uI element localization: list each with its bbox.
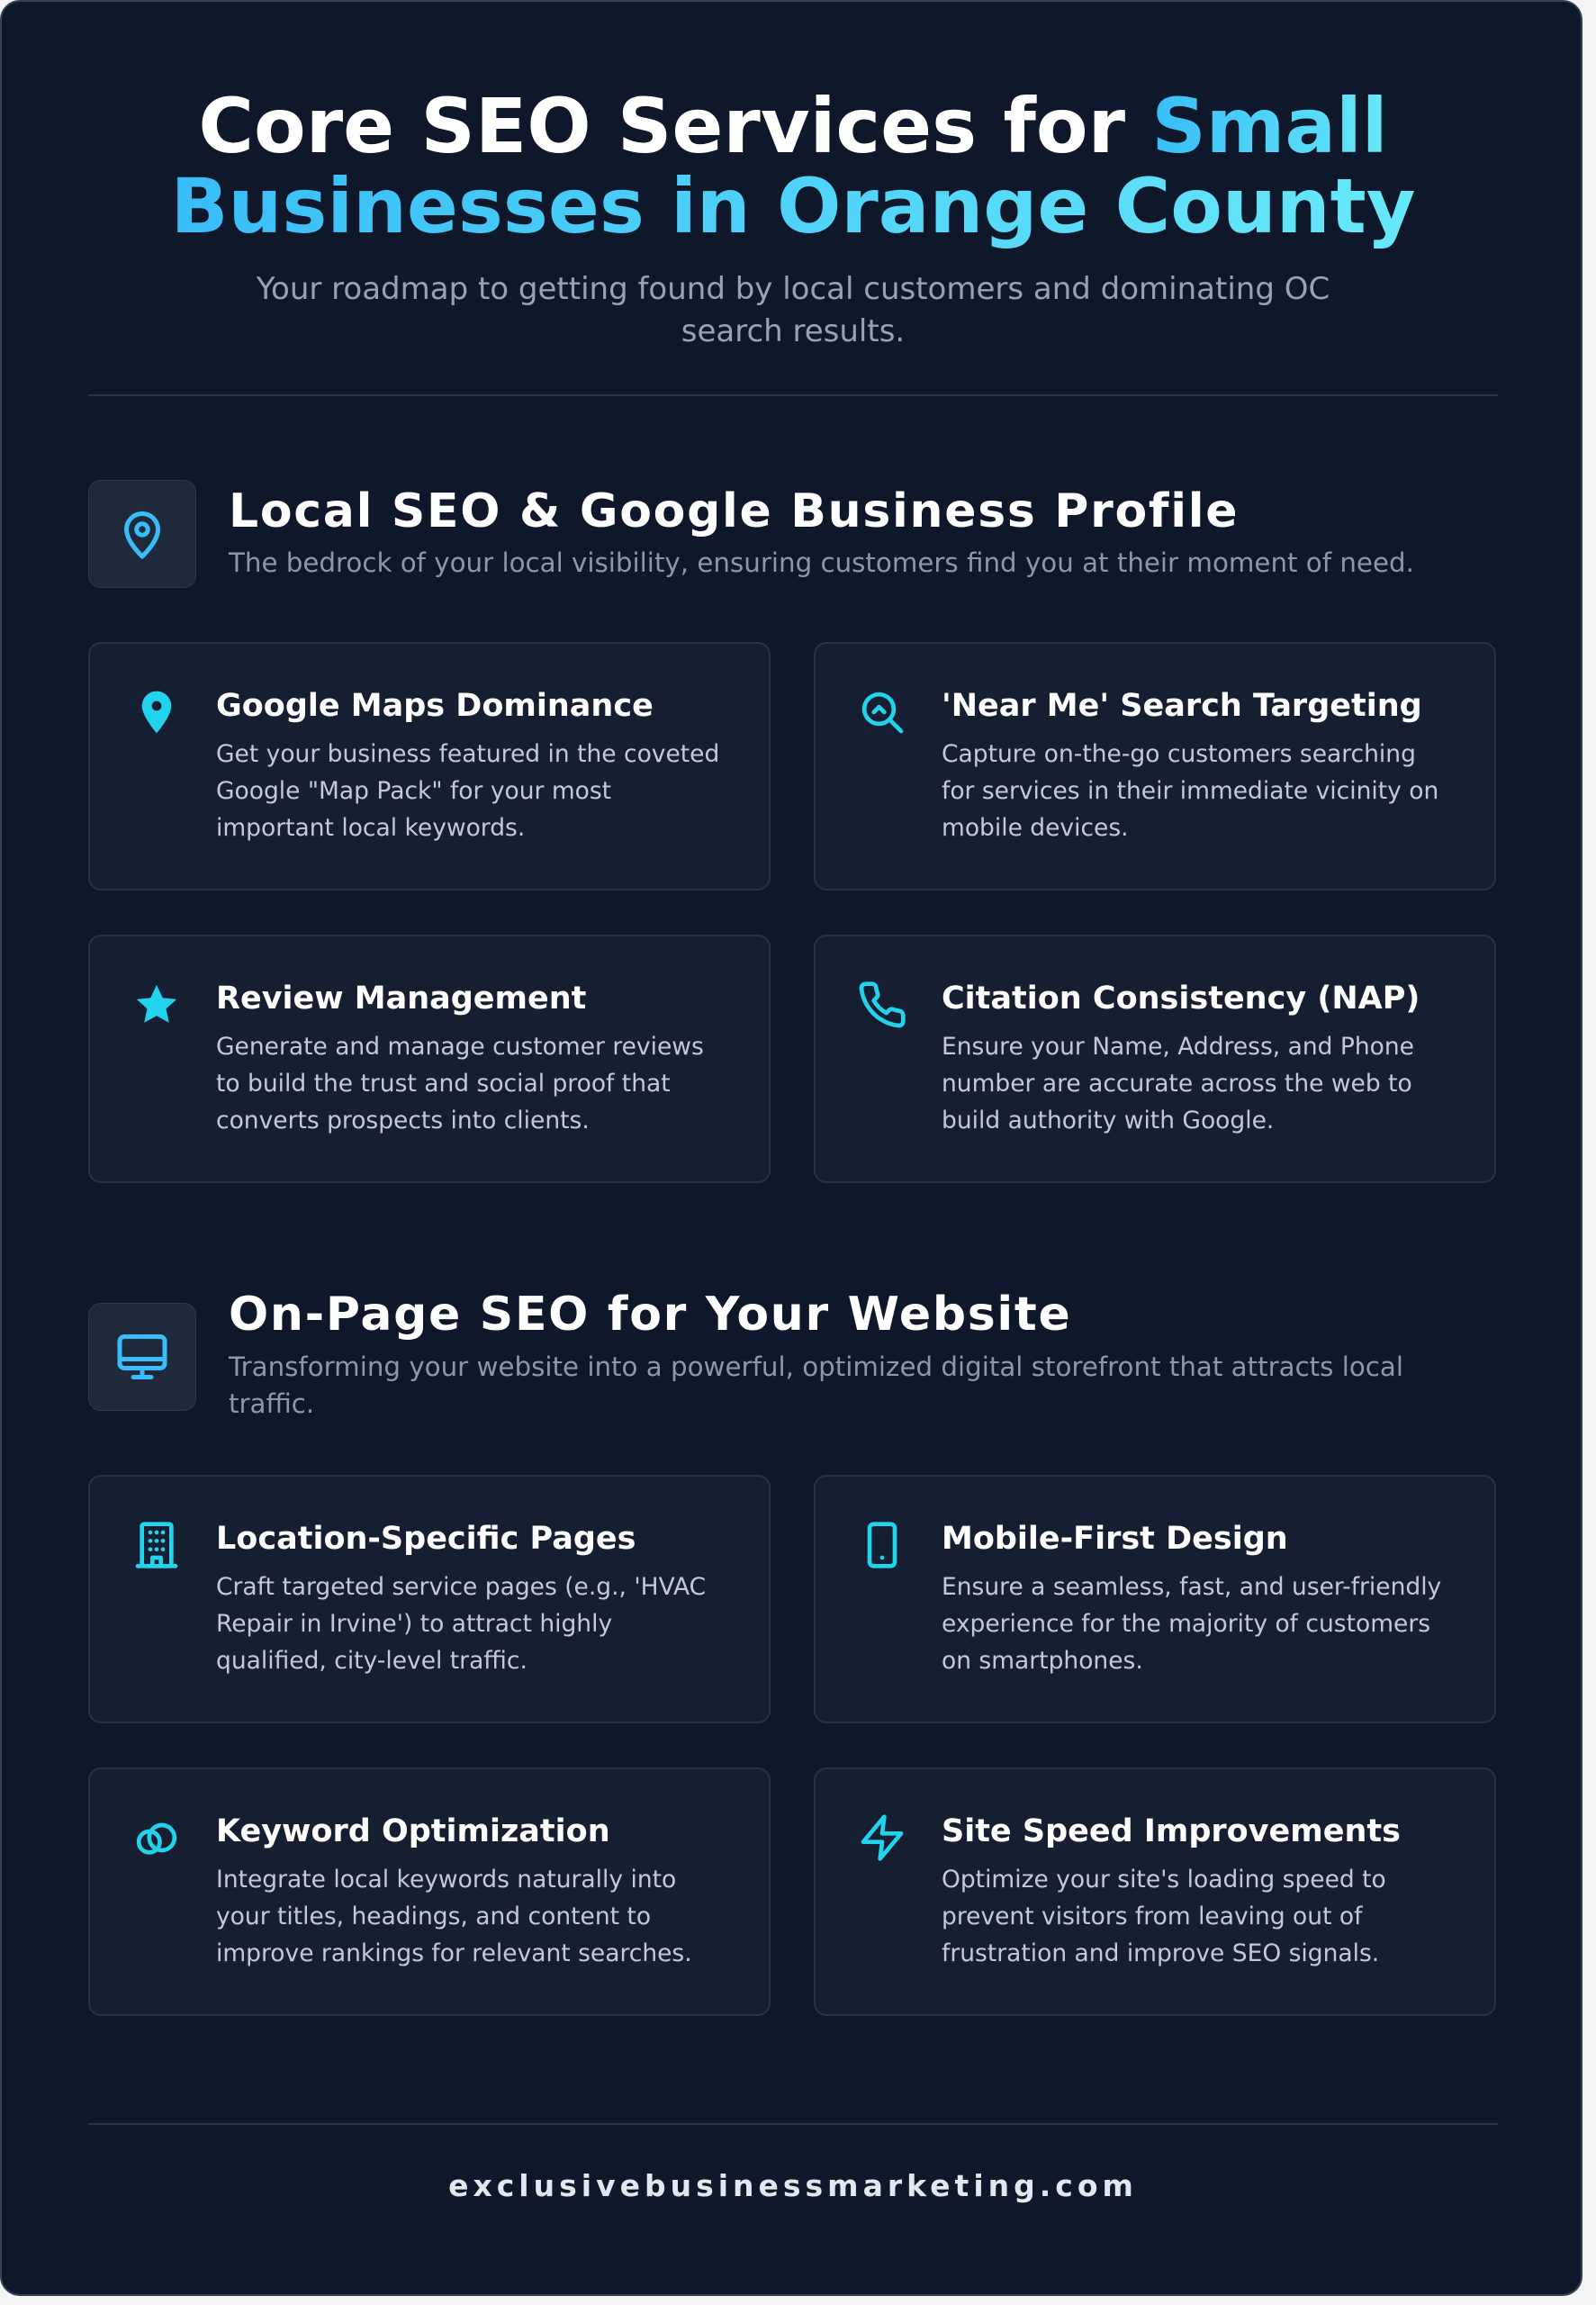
card: Location-Specific Pages [88, 1475, 771, 1723]
card: Mobile-First Design: Mobile-First Design [942, 1521, 1288, 1557]
heading: section 2: On-Page SEO for Your Website [229, 1288, 1071, 1342]
icon: star [137, 985, 176, 1023]
card: Near Me Search Targeting [814, 642, 1496, 890]
card: Site Speed Improvements: Optimize your site's loading speed to prevent visitors from leaving out of frustration and improve SEO signals. [942, 1866, 1386, 1967]
card: Citation Consistency: Citation Consistency (NAP) [942, 981, 1420, 1017]
title [171, 82, 1415, 250]
card: Location-Specific Pages: Location-Specific Pages [216, 1521, 636, 1557]
card: Review Management: Generate and manage customer reviews to build the trust and social proof that converts prospects into clients. [216, 1033, 704, 1134]
card: Keyword Optimization [88, 1767, 771, 2016]
footer: exclusivebusinessmarketing.com [448, 2168, 1138, 2203]
icon: section 2 monitor [88, 1303, 196, 1411]
icon: smartphone [868, 1522, 897, 1568]
icon: map pin [142, 692, 171, 733]
card: Keyword Optimization: Keyword Optimization [216, 1813, 610, 1849]
icon: building [135, 1522, 178, 1568]
icon: search [862, 692, 904, 733]
title: Businesses in Orange County [171, 162, 1415, 250]
icon: lightning [861, 1814, 904, 1861]
heading: section 1: Local SEO & Google Business Profile [229, 484, 1239, 538]
card: Review Management: Review Management [216, 981, 586, 1017]
icon: linked circles [137, 1822, 176, 1855]
subtitle: Your roadmap to getting found by local customers and dominating OC search results. [257, 271, 1330, 349]
title: Core SEO Services for Small [198, 82, 1388, 170]
card: Mobile-First Design [814, 1475, 1496, 1723]
card: Location-Specific Pages: Craft targeted service pages (e.g., 'HVAC Repair in Irvine') to attract highly qualified, city-level traffic. [216, 1573, 706, 1675]
card: Site Speed Improvements: Site Speed Improvements [942, 1813, 1401, 1849]
card: Near Me Search Targeting: 'Near Me' Search Targeting [942, 688, 1422, 724]
card: Review Management [88, 935, 771, 1183]
card: Near Me Search Targeting: Capture on-the-go customers searching for services in their immediate vicinity on mobile devices. [942, 740, 1438, 842]
card: Keyword Optimization: Integrate local keywords naturally into your titles, headings, and content to improve rankings for relevant searches. [216, 1866, 692, 1967]
section 2 description: Transforming your website into a powerful, optimized digital storefront that attracts local traffic. [229, 1351, 1403, 1419]
icon: section 1 location pin [88, 480, 196, 588]
section 1 description: The bedrock of your local visibility, ensuring customers find you at their moment of need. [229, 547, 1414, 578]
card: Citation Consistency: Ensure your Name, Address, and Phone number are accurate across the web to build authority with Google. [942, 1033, 1414, 1134]
card: Google Maps Dominance [88, 642, 771, 890]
card: Site Speed Improvements [814, 1767, 1496, 2016]
card: Citation Consistency [814, 935, 1496, 1183]
icon: phone [859, 981, 906, 1028]
card: Mobile-First Design: Ensure a seamless, fast, and user-friendly experience for the majority of customers on smartphones. [942, 1573, 1441, 1675]
card: Google Maps Dominance: Get your business featured in the coveted Google "Map Pack" for your most important local keywords. [216, 740, 719, 842]
card: Google Maps Dominance: Google Maps Dominance [216, 688, 654, 724]
